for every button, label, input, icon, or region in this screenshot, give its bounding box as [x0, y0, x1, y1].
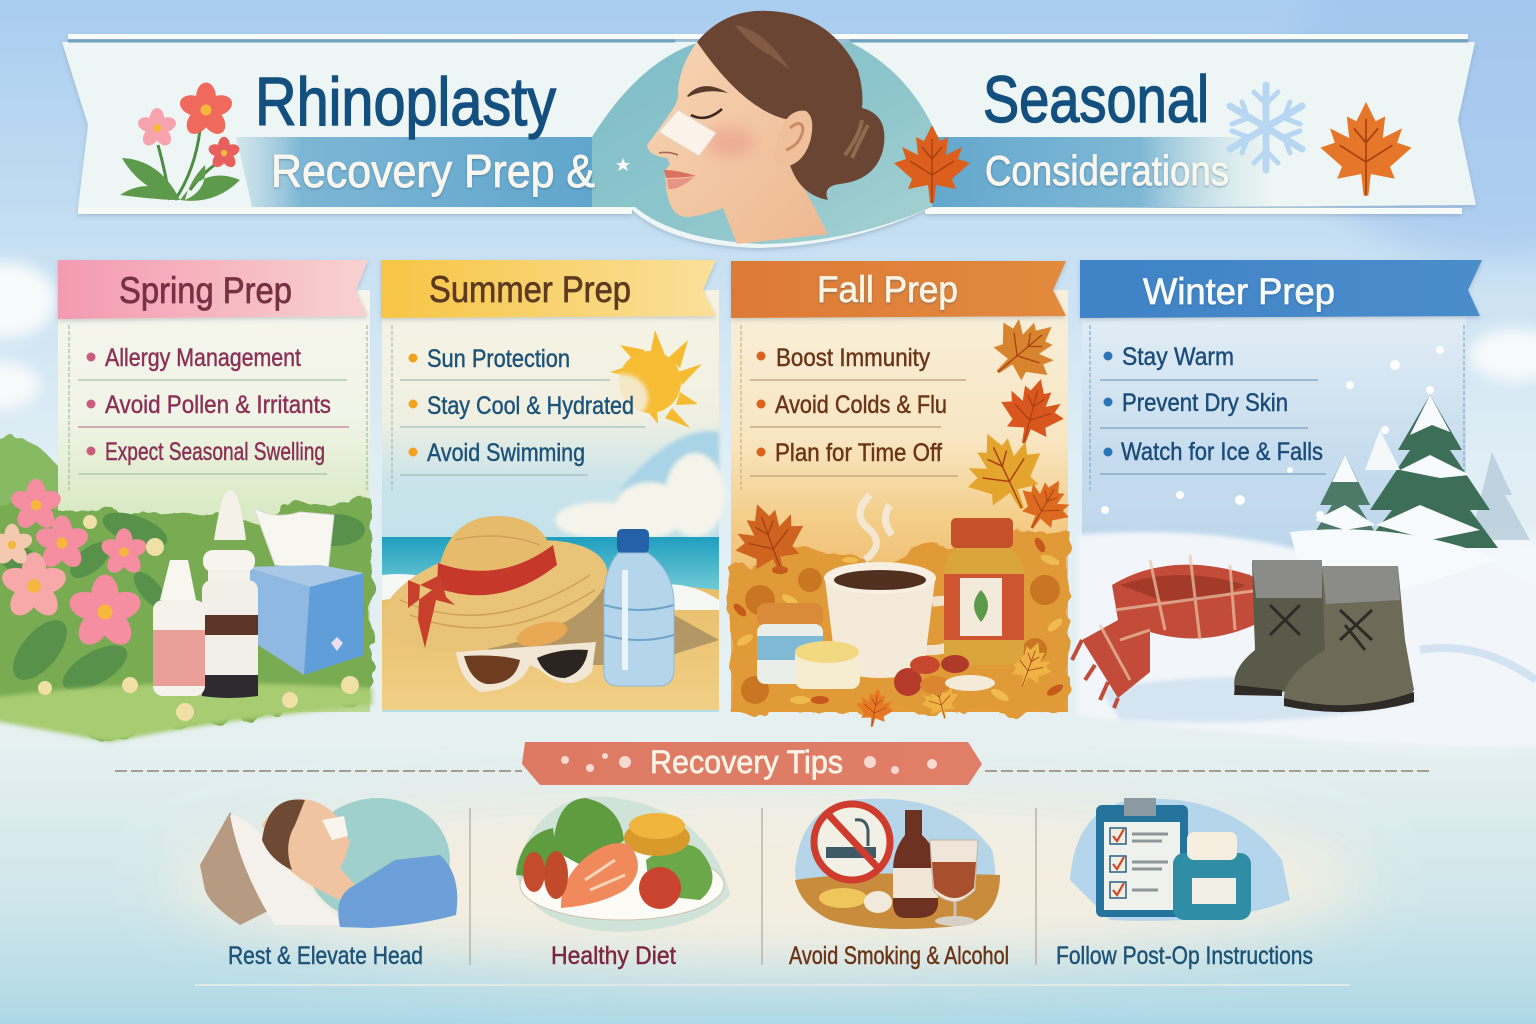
winter checklist: Prevent Dry Skin — [1122, 389, 1288, 417]
icon: tissue box — [245, 508, 364, 675]
summer clouds — [620, 431, 719, 490]
tip: healthy diet — [515, 796, 730, 932]
winter checklist: Stay Warm — [1122, 343, 1234, 371]
icon: steaming mug — [824, 495, 966, 678]
title banner — [62, 11, 1476, 248]
summer heading: Summer Prep — [429, 269, 631, 310]
icon: water bottle — [604, 529, 674, 686]
icon: sunglasses — [456, 617, 596, 692]
spring checklist: Allergy Management — [105, 344, 301, 372]
spring header ribbon — [58, 260, 368, 319]
spring checklist: Avoid Pollen & Irritants — [105, 391, 331, 419]
icon: sun — [596, 330, 702, 428]
winter ground snow — [1078, 532, 1536, 745]
heading: Considerations: Considerations — [985, 147, 1229, 194]
panel: spring — [0, 260, 372, 742]
ear — [774, 111, 812, 167]
summer checklist: Avoid Swimming — [427, 439, 585, 467]
tip: follow post-op instructions — [1070, 798, 1290, 921]
icon: snowy pine trees — [1290, 395, 1500, 590]
portrait oval — [592, 42, 932, 244]
section: recovery tips — [115, 742, 1432, 985]
spring checklist — [69, 325, 367, 490]
snowfall — [1101, 346, 1444, 519]
winter checklist: Watch for Ice & Falls — [1121, 438, 1323, 466]
summer header ribbon — [381, 260, 716, 318]
fall checklist: Boost Immunity — [776, 344, 930, 372]
icon: straw hat — [371, 516, 619, 672]
banner ribbon — [62, 34, 1476, 248]
star — [616, 158, 630, 171]
winter hills behind panel — [1300, 533, 1536, 746]
heading: Seasonal: Seasonal — [983, 62, 1209, 136]
icon: nasal spray bottle — [202, 490, 258, 698]
summer checklist — [392, 325, 645, 490]
icon: winter boots — [1234, 560, 1414, 712]
fall checklist: Avoid Colds & Flu — [775, 391, 947, 419]
panel: summer — [371, 260, 725, 712]
flowers icon spring — [120, 82, 241, 201]
maple leaf — [894, 125, 970, 203]
fall leaves — [723, 301, 1082, 730]
tip: rest and elevate head — [200, 798, 457, 928]
heading: Rhinoplasty: Rhinoplasty — [255, 64, 556, 140]
winter heading: Winter Prep — [1143, 271, 1335, 312]
summer sea and beach — [382, 537, 719, 710]
blue band right — [900, 137, 1270, 207]
icon: plaid scarf — [1072, 555, 1270, 708]
bandage — [659, 110, 716, 156]
icon: small dropper bottle — [153, 560, 205, 696]
tip: avoid smoking and alcohol — [795, 799, 1000, 929]
lips — [664, 170, 696, 178]
panel: fall — [723, 261, 1082, 730]
woman profile with nose bandage — [647, 11, 884, 244]
snowflake — [1230, 85, 1302, 170]
fall header ribbon — [731, 261, 1066, 318]
summer checklist: Stay Cool & Hydrated — [427, 392, 634, 420]
summer checklist: Sun Protection — [427, 345, 570, 373]
fall heading: Fall Prep — [817, 269, 958, 310]
recovery tips heading: Recovery Tips — [650, 744, 843, 780]
winter checklist — [1090, 325, 1464, 490]
panel: winter — [1072, 260, 1536, 745]
fall checklist — [741, 325, 966, 490]
left foliage behind spring panel — [0, 439, 70, 720]
spring heading: Spring Prep — [119, 270, 292, 311]
label: Follow Post-Op Instructions — [1056, 942, 1313, 970]
fall checklist: Plan for Time Off — [775, 439, 942, 467]
winter header ribbon — [1080, 260, 1482, 318]
label: Rest & Elevate Head — [228, 942, 423, 970]
spring checklist: Expect Seasonal Swelling — [105, 438, 325, 466]
spring garden — [0, 479, 372, 742]
maple leaf right — [1320, 102, 1412, 196]
heading: Recovery Prep &: Recovery Prep & — [271, 145, 595, 197]
icon: pill jars and pills — [757, 603, 995, 696]
label: Avoid Smoking & Alcohol — [789, 942, 1009, 970]
recovery tips ribbon — [522, 742, 982, 785]
icon: vitamin bottle — [944, 518, 1024, 665]
label: Healthy Diet — [551, 942, 676, 970]
blue band left — [236, 137, 600, 207]
eyebrow and eye — [687, 86, 728, 97]
